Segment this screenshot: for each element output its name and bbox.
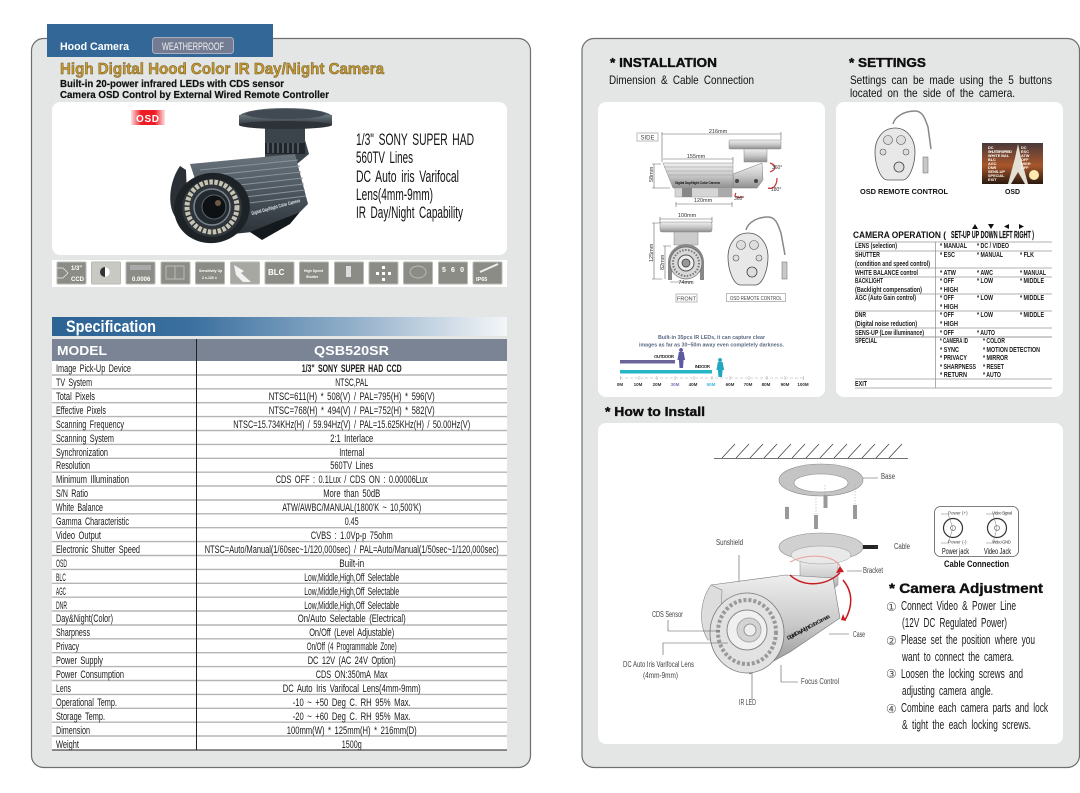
diagram: side view with dimensions (637, 129, 782, 207)
diagram: side view with dimensions: 360° (734, 196, 744, 202)
part labels: Bracket (863, 566, 884, 575)
heading: installation: * INSTALLATION (610, 55, 717, 70)
feature icon strip (52, 260, 507, 287)
highlights text: Lens(4mm-9mm) (356, 185, 433, 204)
feature icon strip: CCD (71, 277, 85, 283)
image: OSD screen: SHUTTER SPEED (988, 150, 1012, 154)
image: OSD screen: EXIT (988, 178, 997, 182)
table row values: 100mm(W) * 125mm(H) * 216mm(D) (287, 725, 417, 737)
chart: IR range bars: 20M (653, 382, 662, 387)
heading: camera operation: CAMERA OPERATION ( (853, 230, 946, 240)
table row values: 0.45 (345, 516, 359, 528)
table: camera operation: * COLOR (983, 338, 1005, 345)
table: camera operation: * CAMERA ID (940, 338, 968, 345)
heading: settings: * SETTINGS (849, 55, 926, 70)
table: camera operation: * OFF (940, 278, 955, 285)
table row values: Internal (339, 447, 364, 459)
table: camera operation (855, 242, 1052, 388)
image: OSD screen: DC (1021, 146, 1027, 150)
table: camera operation: * AWC (977, 270, 993, 277)
camera adjustment steps: ① (886, 600, 897, 614)
table row values: 2:1 Interlace (330, 433, 373, 445)
specification heading bar: Specification (66, 317, 156, 336)
table row labels: TV System (56, 377, 92, 389)
table row values: NTSC=15.734KHz(H) / 59.94Hz(V) / PAL=15.625KHz(H) / 50.00Hz(V) (233, 419, 470, 431)
highlights text: 1/3" SONY SUPER HAD (356, 130, 474, 149)
part labels: IR LED (739, 698, 756, 707)
table: camera operation: SPECIAL (855, 338, 878, 345)
table row labels: Gamma Characteristic (56, 516, 129, 528)
table: camera operation: (Backlight compensation) (855, 287, 922, 294)
table: camera operation: AGC (Auto Gain control) (855, 295, 916, 302)
table row labels (56, 363, 140, 751)
labels: front and remote: OSD REMOTE CONTROL (730, 296, 782, 302)
panel: dimension drawings (598, 102, 825, 397)
chart: IR range bars: 100M (797, 382, 809, 387)
badge: OSD (131, 110, 165, 125)
table row labels: Synchronization (56, 447, 108, 459)
part labels: DC Auto Iris Varifocal Lens (623, 660, 694, 669)
table: camera operation: * MIDDLE (1020, 278, 1044, 285)
image: OSD screen: ESC (1021, 150, 1029, 154)
table row labels: Lens (56, 683, 71, 695)
table: camera operation: * OFF (940, 295, 955, 302)
highlights text: DC Auto iris Varifocal (356, 167, 459, 186)
table row labels: Operational Temp. (56, 697, 117, 709)
image: OSD screen (982, 143, 1043, 184)
diagram: side view with dimensions: Digital Day/Night Color Camera (675, 181, 720, 185)
highlights text (356, 130, 474, 222)
table row values: DC 12V (AC 24V Option) (308, 655, 396, 667)
panel: product photo and highlights (52, 102, 507, 255)
chart: IR range bars (617, 348, 809, 387)
table row values: More than 50dB (323, 488, 380, 500)
panel: settings (836, 102, 1063, 397)
table row labels: BLC (56, 572, 66, 584)
panel: left product page (32, 38, 530, 768)
diagram: OSD remote control (728, 217, 787, 285)
camera adjustment steps: Connect Video & Power Line (901, 598, 1016, 613)
diagram: side view with dimensions: 120mm (694, 198, 713, 204)
table: camera operation: DNR (855, 312, 866, 319)
IR range caption (639, 335, 784, 348)
camera adjustment steps: want to connect the camera. (901, 649, 1014, 664)
table: camera operation: * HIGH (940, 287, 958, 294)
exploded view: camera assembly: Digital Day/Night Color Camera (786, 613, 832, 642)
labels: front and remote: FRONT (677, 296, 697, 302)
table: camera operation: * MIDDLE (1020, 312, 1044, 319)
table: camera operation: * ESC (940, 252, 955, 259)
table row values: NTSC,PAL (335, 377, 368, 389)
table row values: 560TV Lines (330, 460, 374, 472)
table: camera operation: * PRIVACY (940, 355, 967, 362)
table row labels: Privacy (56, 641, 79, 653)
image: OSD screen: BLC (988, 158, 996, 162)
diagram: cable connection: Power (-) (948, 540, 967, 544)
table: camera operation: * LOW (977, 278, 993, 285)
part labels: CDS Sensor (652, 610, 683, 619)
image: OSD screen: OFF (1021, 166, 1029, 170)
IR range caption: images as far as 30~50m away even completely darkness. (639, 342, 784, 348)
table row labels: S/N Ratio (56, 488, 88, 500)
table: camera operation: * DC / VIDEO (977, 243, 1009, 250)
specification heading bar (52, 317, 507, 336)
table: camera operation: * LOW (977, 312, 993, 319)
table: camera operation: * HIGH (940, 321, 958, 328)
table: camera operation: WHITE BALANCE control (855, 270, 918, 277)
camera adjustment steps: (12V DC Regulated Power) (902, 615, 1007, 630)
table: camera operation: LENS (selection) (855, 243, 897, 250)
diagram: cable connection: Video GND (992, 540, 1012, 544)
table row values: ATW/AWBC/MANUAL(1800'K ~ 10,500'K) (282, 502, 421, 514)
table row values: On/Off (Level Adjustable) (309, 627, 394, 639)
specification table (52, 339, 507, 751)
table: camera operation: * MIDDLE (1020, 295, 1044, 302)
diagram: front view with dimensions: 74mm (678, 280, 694, 286)
table row values: DC Auto Iris Varifocal Lens(4mm-9mm) (283, 683, 421, 695)
feature icon strip: 1/3" (71, 266, 82, 272)
feature icon strip: 0.0006 (132, 277, 151, 283)
feature icon strip: Sensitivity Up (199, 269, 222, 273)
camera adjustment steps: adjusting camera angle. (902, 683, 993, 698)
subtitle lines: Built-in 20-power infrared LEDs with CDS sensor (60, 78, 284, 90)
table row values: Low,Middle,High,Off Selectable (304, 586, 399, 598)
chart: IR range bars: INDOOR (695, 364, 711, 369)
table: camera operation: * MANUAL (940, 243, 968, 250)
diagram: front view with dimensions: 100mm (678, 213, 697, 219)
diagram: side view with dimensions: 155mm (687, 154, 706, 160)
diagram: side view with dimensions: 216mm (709, 129, 728, 135)
chart: IR range bars: 10M (634, 382, 643, 387)
table: camera operation: * FLK (1020, 252, 1034, 259)
header tab: Hood Camera (47, 24, 273, 57)
exploded view: base ring and screws (779, 464, 863, 529)
table row labels: Electronic Shutter Speed (56, 544, 140, 556)
table header: model: MODEL (57, 344, 107, 358)
table row values: Built-in (339, 558, 364, 570)
part labels (623, 472, 910, 707)
chart: IR range bars: 40M (689, 382, 698, 387)
table row labels: Effective Pixels (56, 405, 106, 417)
feature icon strip: 560 (442, 267, 464, 274)
table row values: CVBS : 1.0Vp-p 75ohm (311, 530, 393, 542)
chart: IR range bars: 30M (671, 382, 680, 387)
diagram: front view with dimensions: 82mm (660, 254, 666, 270)
table header: model (52, 339, 507, 361)
table row values: On/Auto Selectable (Electrical) (298, 613, 406, 625)
IR range caption: Built-in 35pcs IR LEDs, it can capture clear (658, 335, 766, 341)
feature icon strip: High Speed (304, 269, 323, 273)
table: camera operation: * SHARPNESS (940, 364, 976, 371)
labels: front and remote (676, 294, 786, 302)
chart: IR range bars: 50M (707, 382, 716, 387)
heading: installation (609, 55, 754, 87)
part labels: Case (853, 630, 865, 639)
table row labels: Image Pick-Up Device (56, 363, 131, 375)
table row values (205, 363, 499, 751)
feature icon strip: 2 x-120 x (202, 276, 217, 280)
chart: IR range bars: 80M (762, 382, 771, 387)
image: OSD screen: SENS-UP (988, 170, 1005, 174)
table: camera operation: * AUTO (983, 372, 1001, 379)
table: camera operation: * OFF (940, 330, 955, 337)
diagram: side view with dimensions: 58mm (649, 166, 655, 182)
diagram: side view with dimensions: 360° (772, 165, 782, 171)
heading: settings (849, 55, 1052, 100)
part labels: Sunshield (716, 538, 743, 547)
diagram: side view with dimensions: 180° (771, 187, 781, 193)
chart: IR range bars: 0M (617, 382, 623, 387)
diagram: cable connection (934, 506, 1018, 569)
photo: IR bullet camera (168, 108, 332, 250)
table row labels: AGC (56, 586, 66, 598)
exploded view: camera assembly (702, 533, 878, 674)
table row labels: Weight (56, 739, 79, 751)
part labels: Cable (894, 542, 910, 551)
captions: remote and OSD (860, 187, 1021, 196)
table: camera operation: * RESET (983, 364, 1005, 371)
image: OSD screen: HIGH (1021, 162, 1031, 166)
feature icon strip: IP65 (476, 277, 487, 283)
table row values: NTSC=Auto/Manual(1/60sec~1/120,000sec) / PAL=Auto/Manual(1/50sec~1/120,000sec) (205, 544, 499, 556)
table: camera operation: (condition and speed control) (855, 261, 930, 268)
table: camera operation: * AUTO (977, 330, 995, 337)
table row values: CDS ON:350mA Max (316, 669, 388, 681)
diagram: OSD remote control (875, 111, 931, 180)
diagram: front view with dimensions (649, 213, 712, 286)
table row labels: Scanning System (56, 433, 114, 445)
table: camera operation: SHUTTER (855, 252, 880, 259)
heading: camera adjustment: * Camera Adjustment (889, 580, 1043, 596)
table: camera operation: EXIT (855, 381, 868, 388)
camera adjustment steps: ④ (886, 702, 897, 716)
image: OSD screen: ATW (1021, 154, 1030, 158)
header tab: Hood Camera: WEATHERPROOF (162, 41, 224, 53)
highlights text: 560TV Lines (356, 148, 413, 167)
heading: camera operation (853, 224, 1034, 241)
part labels: (4mm-9mm) (643, 671, 678, 680)
diagram: front view with dimensions: 125mm (649, 243, 655, 262)
chart: IR range bars: 60M (726, 382, 735, 387)
table: camera operation: * LOW (977, 295, 993, 302)
badge: OSD: OSD (136, 114, 159, 125)
table: camera operation: (Digital noise reduction) (855, 321, 917, 328)
table row values: -20 ~ +60 Deg C. RH 95% Max. (293, 711, 411, 723)
camera adjustment steps: ② (886, 634, 897, 648)
captions: remote and OSD: OSD (1005, 187, 1021, 196)
chart: IR range bars: OUTDOOR (654, 354, 675, 359)
highlights text: IR Day/Night Capability (356, 203, 463, 222)
table row labels: Scanning Frequency (56, 419, 124, 431)
table row values: NTSC=768(H) * 494(V) / PAL=752(H) * 582(V) (269, 405, 435, 417)
camera adjustment steps: ③ (886, 667, 897, 681)
panel: how to install (598, 423, 1063, 744)
heading: how to install: * How to Install (605, 404, 705, 419)
table row values: On/Off (4 Programmable Zone) (307, 641, 397, 653)
feature icon strip: Shutter (306, 275, 319, 279)
table row values: NTSC=611(H) * 508(V) / PAL=795(H) * 596(V) (269, 391, 435, 403)
diagram: cable connection: Cable Connection (944, 559, 1009, 569)
image: OSD screen: DC (988, 146, 994, 150)
ceiling hatch (714, 444, 908, 458)
title: High Digital Hood Color IR Day/Night Camera (60, 61, 384, 78)
table: camera operation: * MANUAL (977, 252, 1004, 259)
table row labels: Total Pixels (56, 391, 95, 403)
table row values: Low,Middle,High,Off Selectable (304, 600, 399, 612)
table row labels: Power Consumption (56, 669, 124, 681)
table row labels: Power Supply (56, 655, 103, 667)
table row values: Low,Middle,High,Off Selectable (304, 572, 399, 584)
subtitle lines: Camera OSD Control by External Wired Remote Controller (60, 89, 329, 101)
table row labels: OSD (56, 558, 67, 570)
chart: IR range bars: 90M (781, 382, 790, 387)
subtitle lines (60, 78, 329, 101)
table row labels: Day&Night(Color) (56, 613, 113, 625)
part labels: Base (881, 472, 895, 481)
part labels: Focus Control (801, 677, 839, 686)
table row labels: Storage Temp. (56, 711, 105, 723)
feature icon strip: BLC (268, 268, 285, 277)
table row labels: Video Output (56, 530, 101, 542)
heading: settings: located on the side of the camera. (850, 86, 1015, 100)
diagram: cable connection: Power (+) (948, 510, 968, 516)
table row values: 1/3" SONY SUPER HAD CCD (302, 363, 402, 375)
panel: right installation page (582, 38, 1080, 768)
table: camera operation: * HIGH (940, 304, 958, 311)
table: camera operation: * MIRROR (983, 355, 1008, 362)
table row values: CDS OFF : 0.1Lux / CDS ON : 0.00006Lux (276, 474, 428, 486)
table row labels: Dimension (56, 725, 90, 737)
photo: IR bullet camera: Digital Day/Night Color Camera (251, 198, 301, 217)
header tab: Hood Camera: Hood Camera (60, 41, 130, 53)
table row labels: White Balance (56, 502, 103, 514)
table row values: 1500g (342, 739, 362, 751)
table: camera operation: * MANUAL (1020, 270, 1047, 277)
table: camera operation: BACKLIGHT (855, 278, 883, 285)
table row labels: Sharpness (56, 627, 90, 639)
table row labels: Resolution (56, 460, 90, 472)
diagram: cable connection: Video Jack (984, 547, 1012, 556)
diagram: cable connection: Power jack (942, 547, 970, 556)
image: OSD screen: SPECIAL (988, 174, 1005, 178)
chart: IR range bars: 70M (744, 382, 753, 387)
table row values: -10 ~ +50 Deg C. RH 95% Max. (293, 697, 411, 709)
image: OSD screen: WHITE BAL (988, 154, 1010, 158)
camera adjustment steps (886, 598, 1048, 732)
table row labels: Minimum Illumination (56, 474, 129, 486)
table: camera operation: SENS-UP (Low illuminance) (855, 330, 924, 337)
heading: installation: Dimension & Cable Connection (609, 73, 754, 87)
table row labels: DNR (56, 600, 67, 612)
captions: remote and OSD: OSD REMOTE CONTROL (860, 187, 948, 196)
diagram: cable connection: Video Signal (992, 510, 1012, 516)
table: camera operation: * ATW (940, 270, 956, 277)
image: OSD screen: DNR (988, 166, 996, 170)
table header: model: QSB520SR (314, 344, 389, 358)
table: camera operation: * MOTION DETECTION (983, 347, 1040, 354)
image: OSD screen: AGC (988, 162, 997, 166)
table: camera operation: * RETURN (940, 372, 967, 379)
image: OSD screen: OFF (1021, 158, 1029, 162)
table: camera operation: * OFF (940, 312, 955, 319)
diagram: side view with dimensions: SIDE (640, 136, 655, 142)
table: camera operation: * SYNC (940, 347, 959, 354)
